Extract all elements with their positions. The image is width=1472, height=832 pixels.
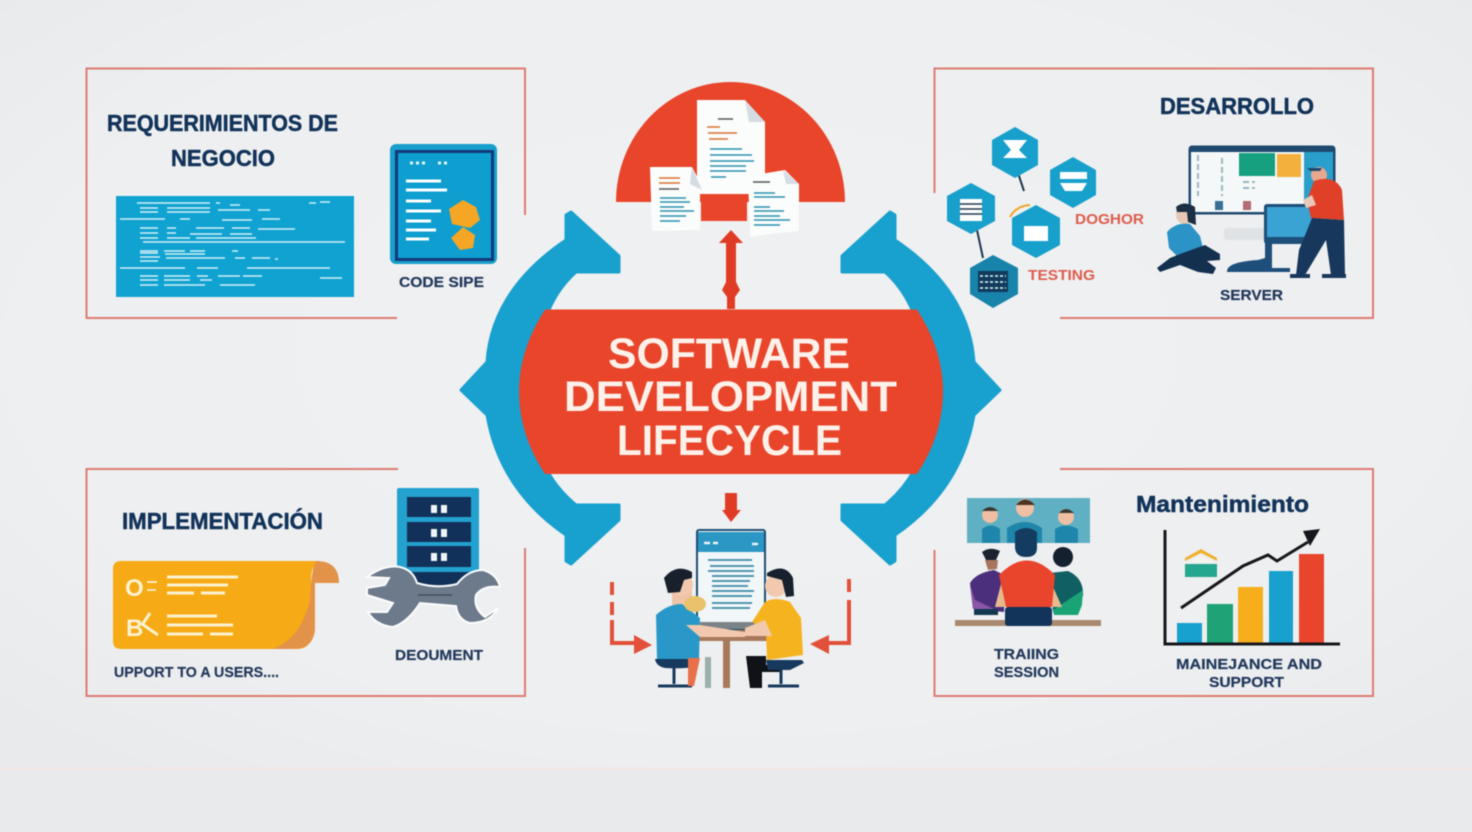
arrow: dashed right [810,579,849,654]
panel: implementación [86,469,525,696]
label: doghor: DOGHOR [1075,211,1144,228]
cycle arrows: left [461,212,619,564]
label: maintenance and support: SUPPORT [1209,674,1284,691]
icon: wrench [367,566,500,627]
person: left [655,569,745,688]
title badge [519,310,943,474]
banner: orange scroll: O [125,575,144,602]
label: training session: TRAIING [994,646,1059,663]
label: server: SERVER [1220,287,1283,304]
label: training session [994,646,1059,681]
label: testing: TESTING [1028,267,1095,284]
illustration: documents on red semicircle [616,82,845,237]
table [693,630,784,688]
title text: DEVELOPMENT [564,373,897,421]
icon: hexagon network [947,127,1096,308]
title text [564,330,897,465]
label: maintenance and support: MAINEJANCE AND [1176,656,1322,673]
label: upport to a users: UPPORT TO A USERS.... [114,664,279,681]
label: deoument: DEOUMENT [395,647,483,664]
heading: requerimientos de negocio [107,110,338,171]
person: right [745,569,804,688]
cycle arrows: right [842,212,1000,564]
code block [116,196,354,297]
trend arrow [1181,529,1320,608]
banner: orange scroll: B [126,615,143,642]
connector lines [977,170,1024,258]
bar chart: maintenance growth [1165,529,1340,644]
label: code sipe: CODE SIPE [399,274,484,291]
label: training session: SESSION [994,664,1059,681]
label: maintenance and support [1176,656,1322,691]
icon: server rack [397,488,479,586]
icon: small house [1185,549,1217,577]
heading: requerimientos de negocio: NEGOCIO [171,145,275,171]
panel: mantenimiento [934,469,1373,696]
title text: LIFECYCLE [617,417,842,465]
panel: requerimientos de negocio [86,68,525,318]
tablet [697,530,765,629]
banner: orange scroll [113,561,339,649]
arrow: up from title to documents [719,230,743,309]
illustration: monitor and two people [1157,147,1346,278]
heading: implementación: IMPLEMENTACIÓN [122,507,323,534]
heading: desarrollo: DESARROLLO [1160,93,1314,119]
title text: SOFTWARE [608,330,850,378]
panel: desarrollo [934,68,1373,318]
illustration: two people at tablet [612,493,849,688]
illustration: training session [955,498,1101,626]
arrow: dashed left [612,582,652,654]
arrow: down to tablet [722,493,741,522]
heading: mantenimiento: Mantenimiento [1136,491,1309,517]
heading: requerimientos de negocio: REQUERIMIENTOS DE [107,110,338,136]
icon: document card [390,144,497,264]
